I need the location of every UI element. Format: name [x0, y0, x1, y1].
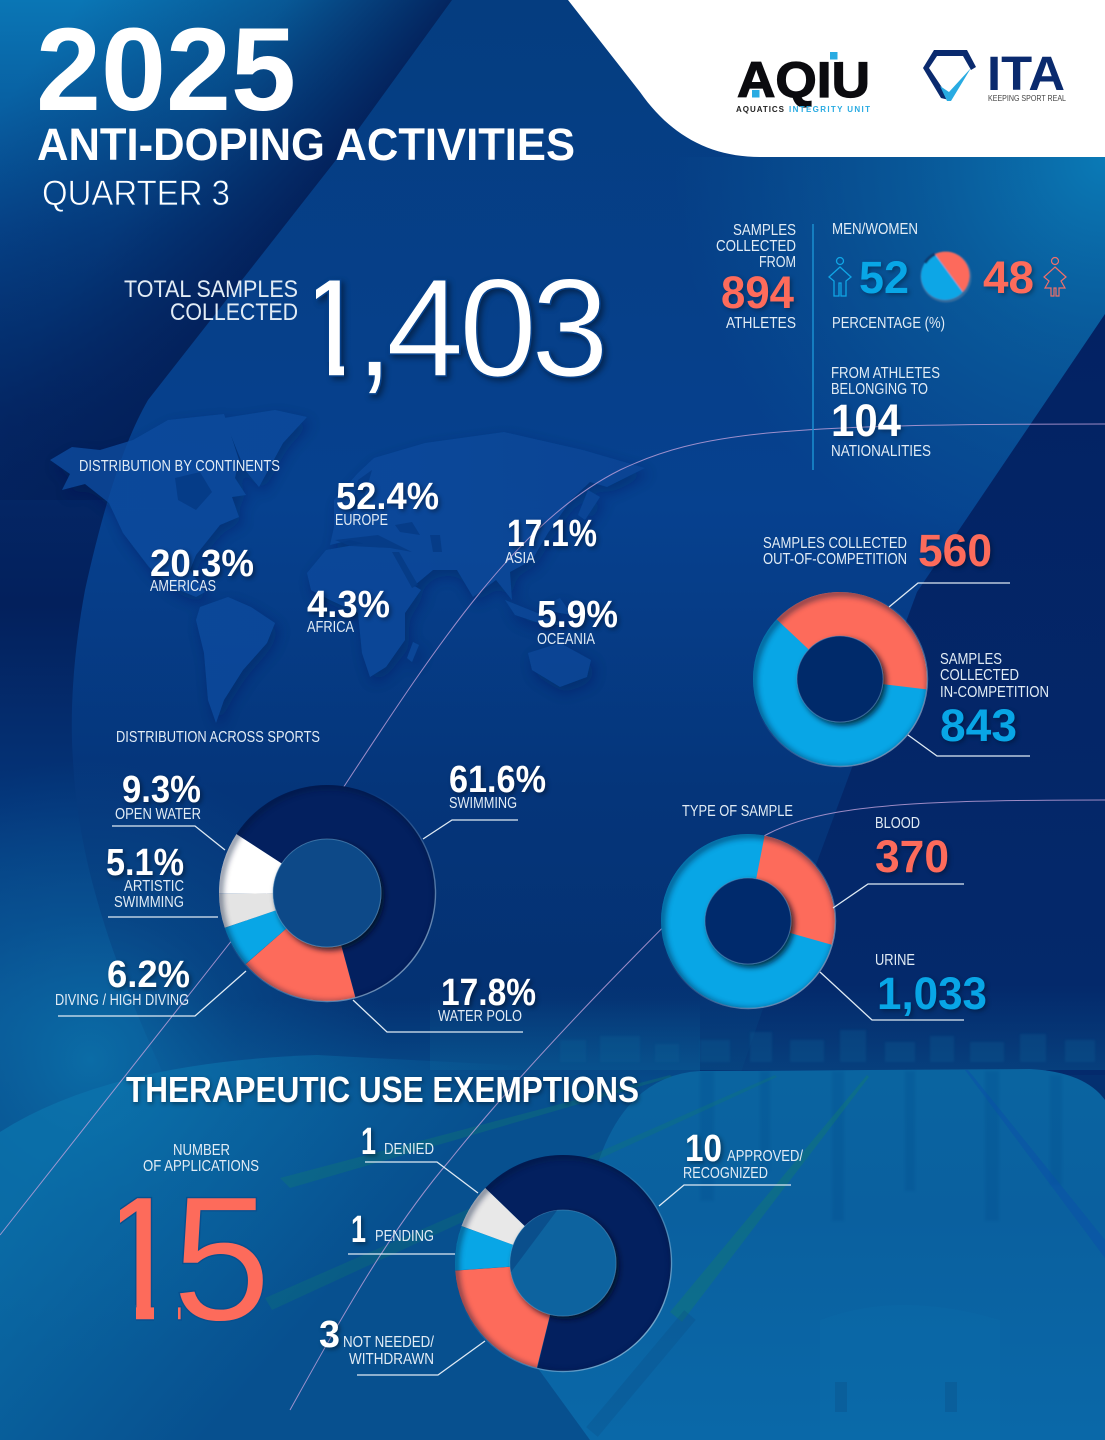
- label: artistic swimming: ARTISTIC: [124, 878, 184, 895]
- panel: distribution by continents: DISTRIBUTION BY CONTINENTS: [79, 458, 280, 475]
- total samples: TOTAL SAMPLES: [124, 276, 298, 303]
- panel: type of sample: TYPE OF SAMPLE: [682, 803, 793, 820]
- label: swimming: [423, 759, 546, 839]
- panel: distribution by continents: OCEANIA: [537, 631, 595, 648]
- men women panel: 48: [983, 252, 1034, 303]
- panel: in and out of competition: OUT-OF-COMPETITION: [763, 551, 907, 568]
- applications count: NUMBER: [173, 1142, 230, 1159]
- panel: distribution by continents: AMERICAS: [150, 578, 216, 595]
- panel: in and out of competition: 560: [918, 525, 992, 576]
- label: artistic swimming: 5.1%: [106, 842, 184, 884]
- panel: in and out of competition: SAMPLES COLLECTED: [763, 535, 907, 552]
- athletes panel: FROM: [759, 254, 796, 271]
- logo: AQIU: INTEGRITY UNIT: [789, 105, 870, 114]
- icon: woman: [1044, 258, 1066, 296]
- panel: type of sample: BLOOD: [875, 815, 920, 832]
- panel: distribution by continents: EUROPE: [335, 512, 388, 529]
- label: open water: 9.3%: [122, 769, 201, 811]
- panel: type of sample: 370: [875, 831, 949, 882]
- athletes panel: SAMPLES: [733, 222, 796, 239]
- label: swimming: 61.6%: [449, 759, 546, 801]
- logo: AQIU: AQUATICS: [736, 105, 785, 114]
- label: not needed: WITHDRAWN: [349, 1351, 434, 1368]
- curved decorative lines: [0, 424, 1105, 1410]
- label: approved: 10: [685, 1128, 722, 1170]
- nationalities panel: NATIONALITIES: [831, 443, 931, 460]
- total samples: [124, 278, 610, 400]
- applications count: 15: [91, 1159, 271, 1358]
- men women panel: [829, 221, 1066, 332]
- title: ANTI-DOPING ACTIVITIES: [37, 119, 575, 170]
- heading: THERAPEUTIC USE EXEMPTIONS: [126, 1069, 639, 1110]
- chart: sample type donut: [660, 834, 838, 1011]
- label: not needed: 3: [319, 1314, 340, 1356]
- label: water polo: WATER POLO: [438, 1008, 522, 1025]
- label: swimming: SWIMMING: [449, 795, 517, 812]
- panel: distribution by continents: AFRICA: [307, 619, 354, 636]
- chart: sports donut: [213, 779, 441, 1007]
- panel: distribution by continents: 4.3%: [307, 584, 390, 626]
- panel: in and out of competition: 843: [940, 700, 1017, 751]
- total samples: 1,403: [293, 249, 609, 406]
- logo: ITA: KEEPING SPORT REAL: [988, 93, 1066, 103]
- panel: in and out of competition: IN-COMPETITION: [940, 684, 1049, 701]
- panel: distribution by continents: 5.9%: [537, 594, 618, 636]
- label: diving: [55, 954, 246, 1016]
- applications count: [120, 1144, 263, 1321]
- men women panel: PERCENTAGE (%): [832, 315, 945, 332]
- panel: distribution across sports: [55, 729, 546, 1032]
- icon: man: [829, 258, 851, 296]
- label: pending: [348, 1209, 455, 1254]
- nationalities panel: 104: [831, 395, 901, 446]
- panel: distribution by continents: 52.4%: [336, 476, 439, 518]
- header logo panel: [568, 0, 1105, 157]
- nationalities panel: [831, 365, 940, 460]
- panel: in and out of competition: SAMPLES: [940, 651, 1002, 668]
- divider: [812, 224, 814, 470]
- panel: in and out of competition: [748, 525, 1049, 771]
- logo: ITA: [923, 48, 1066, 103]
- panel: distribution by continents: [79, 458, 618, 648]
- panel: in and out of competition: COLLECTED: [940, 667, 1019, 684]
- nationalities panel: BELONGING TO: [831, 381, 928, 398]
- men women panel: 52: [859, 252, 909, 303]
- panel: therapeutic use exemptions: [91, 1069, 803, 1377]
- label: approved: RECOGNIZED: [683, 1165, 768, 1182]
- title: [36, 4, 575, 213]
- panel: distribution by continents: ASIA: [505, 550, 535, 567]
- panel: type of sample: URINE: [875, 952, 915, 969]
- label: pending: 1: [351, 1209, 366, 1251]
- applications count: OF APPLICATIONS: [143, 1158, 259, 1175]
- label: diving: 6.2%: [107, 954, 190, 996]
- label: pending: PENDING: [375, 1228, 434, 1245]
- label: water polo: 17.8%: [441, 972, 536, 1014]
- label: open water: [112, 769, 225, 850]
- label: approved: APPROVED/: [727, 1148, 803, 1165]
- label: artistic swimming: [106, 842, 218, 917]
- athletes panel: 894: [721, 267, 794, 318]
- logo: ITA: ITA: [987, 48, 1065, 101]
- label: diving: DIVING / HIGH DIVING: [55, 992, 189, 1009]
- label: denied: DENIED: [384, 1141, 434, 1158]
- total samples: COLLECTED: [170, 299, 298, 326]
- panel: distribution across sports: DISTRIBUTION ACROSS SPORTS: [116, 729, 320, 746]
- label: approved: [659, 1128, 803, 1206]
- chart: competition donut: [748, 587, 932, 771]
- label: water polo: [353, 972, 536, 1032]
- label: artistic swimming: SWIMMING: [114, 894, 184, 911]
- world map: [50, 410, 645, 723]
- chart: TUE donut: [449, 1149, 677, 1377]
- title: QUARTER 3: [42, 174, 230, 213]
- athletes panel: [716, 222, 796, 332]
- panel: distribution by continents: 17.1%: [507, 513, 597, 555]
- logo: AQIU: AQIU: [737, 52, 870, 108]
- chart: gender pie: [920, 252, 972, 302]
- panel: distribution by continents: 20.3%: [150, 543, 254, 585]
- men women panel: MEN/WOMEN: [832, 221, 918, 238]
- nationalities panel: FROM ATHLETES: [831, 365, 940, 382]
- label: denied: 1: [361, 1121, 376, 1163]
- title: 2025: [36, 4, 296, 136]
- panel: type of sample: 1,033: [877, 968, 987, 1019]
- label: open water: OPEN WATER: [115, 806, 201, 823]
- label: denied: [361, 1121, 478, 1193]
- athletes panel: COLLECTED: [716, 238, 796, 255]
- panel: type of sample: [660, 803, 987, 1020]
- athletes panel: ATHLETES: [726, 315, 796, 332]
- label: not needed: [319, 1314, 485, 1375]
- label: not needed: NOT NEEDED/: [343, 1334, 434, 1351]
